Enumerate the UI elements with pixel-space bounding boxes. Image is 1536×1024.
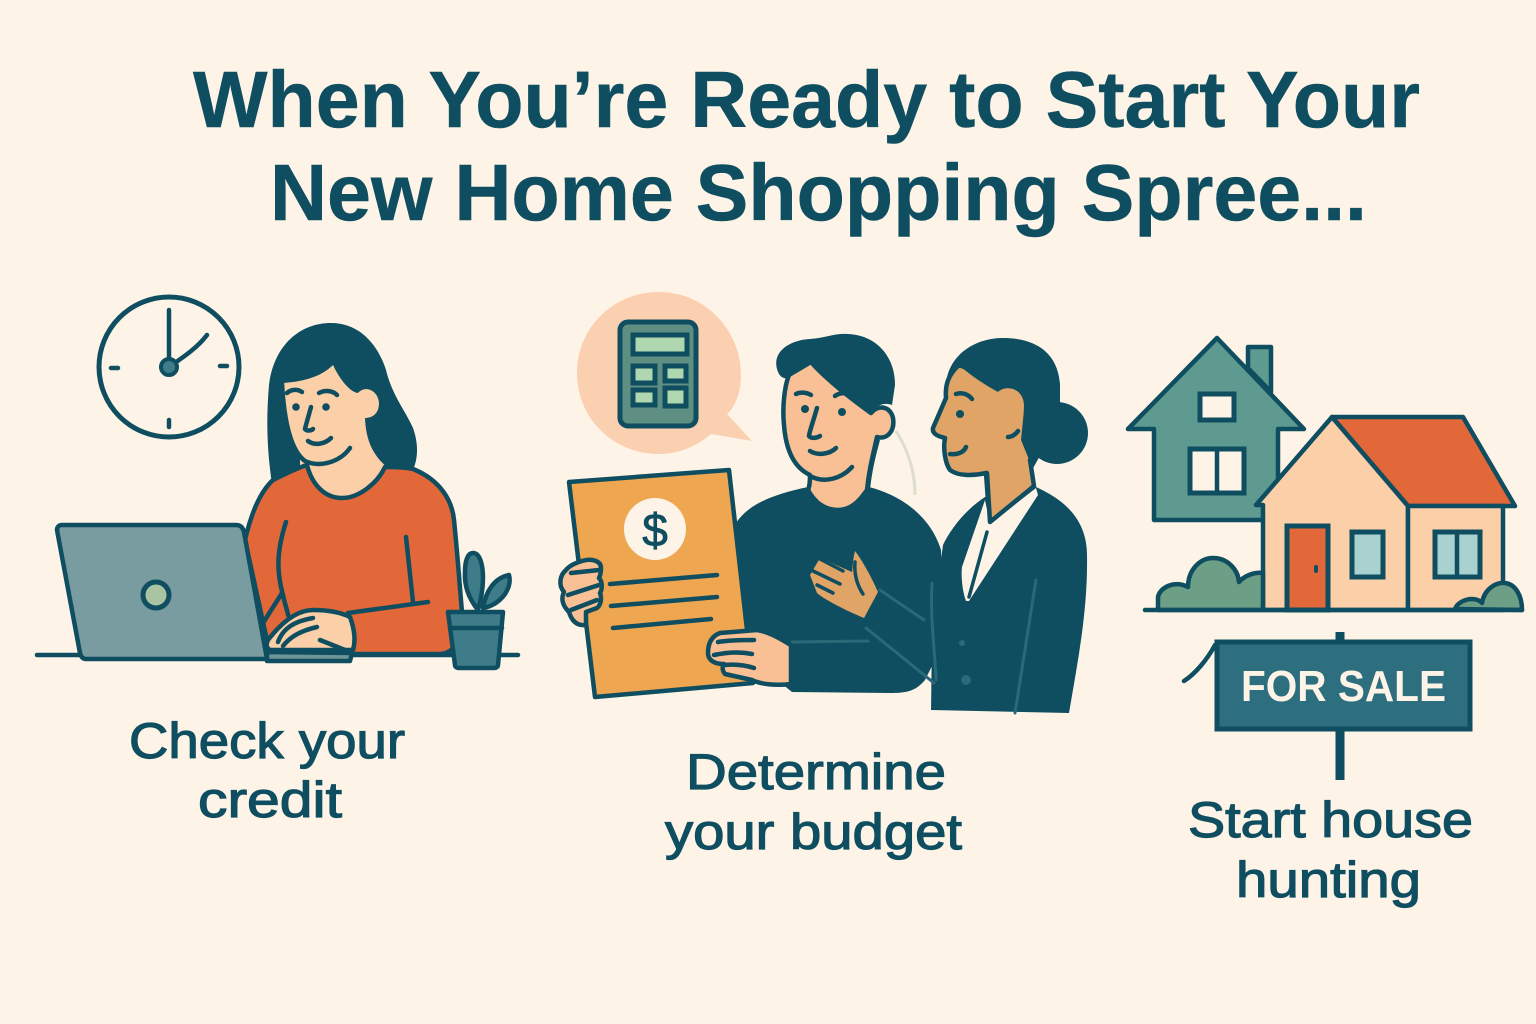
icon: left bush [1158,558,1263,610]
icon: right bush [1455,583,1522,610]
label: check your credit: Check your [129,713,405,769]
label: check your credit: credit [198,772,342,828]
title [193,55,1420,237]
woman's gesturing hand [810,551,878,618]
speech bubble with calculator [577,292,752,454]
man's right hand [708,630,791,685]
icon: budget document: $ [642,504,668,556]
icon: front house [1256,417,1515,610]
man's left hand [560,560,602,625]
desk line [37,653,518,657]
illustration: woman at laptop [37,323,518,668]
label: start house hunting [1188,792,1473,908]
label: start house hunting: Start house [1188,792,1473,848]
icon: potted plant [448,553,510,668]
icon: wall clock [99,297,239,437]
for sale sign [1184,632,1470,780]
label: check your credit [129,713,405,828]
for sale sign: FOR SALE [1241,662,1446,711]
panel: start house hunting [1128,338,1522,908]
ground line [1145,608,1522,612]
panel: determine your budget [560,292,1088,860]
title: When You’re Ready to Start Your [193,55,1420,144]
panel: check your credit [37,297,518,828]
label: determine your budget [665,744,962,860]
illustration: man [736,334,945,693]
icon: back house [1128,338,1304,520]
faint accent arc [896,431,915,495]
label: determine your budget: your budget [665,804,962,860]
label: determine your budget: Determine [686,744,946,800]
label: start house hunting: hunting [1236,852,1421,908]
advisor neck [986,458,1034,521]
icon: budget document [569,470,753,697]
icon: laptop [57,525,352,661]
title: New Home Shopping Spree... [270,148,1367,237]
illustration: woman advisor [792,338,1088,713]
